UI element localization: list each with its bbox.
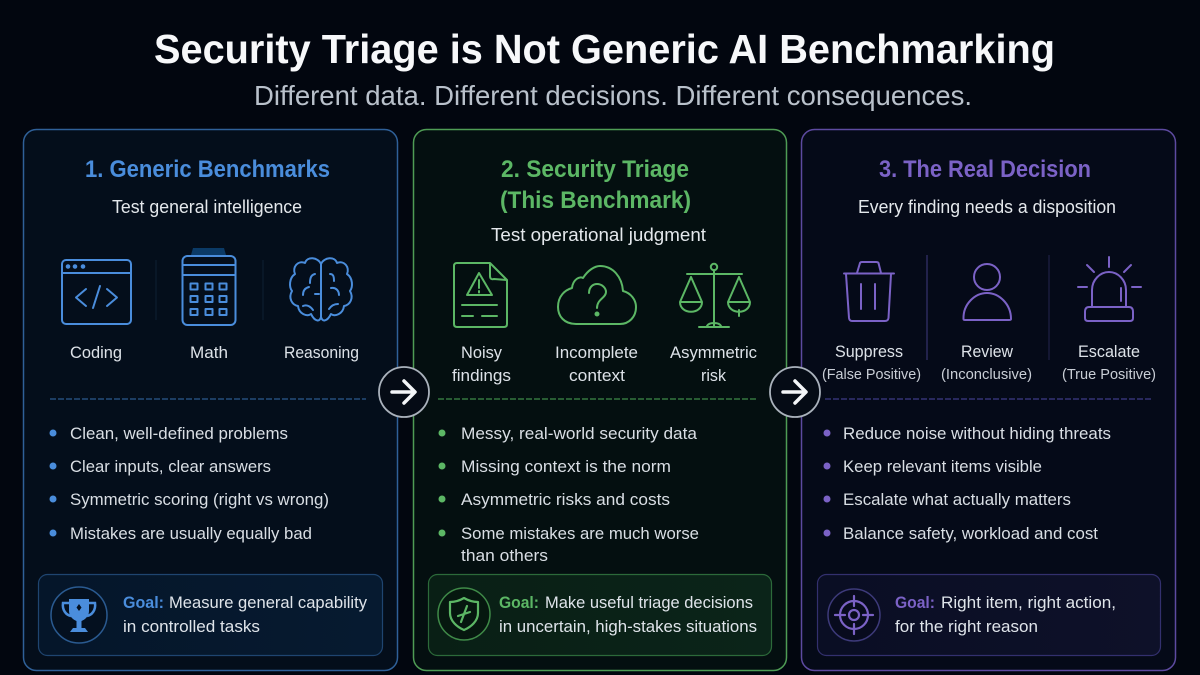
goal text: Goal:	[895, 593, 935, 612]
panel: security triage	[414, 130, 786, 670]
goal text: in uncertain, high-stakes situations	[499, 617, 757, 636]
goal text: Make useful triage decisions	[545, 593, 753, 612]
subheading: test operational judgment: Test operational judgment	[491, 225, 706, 245]
bullet list	[824, 424, 1111, 543]
bullet list: Clear inputs, clear answers	[70, 457, 271, 476]
goal text: Goal:	[499, 593, 539, 612]
label: math: Math	[190, 343, 228, 362]
arrow: generic to triage	[379, 367, 429, 417]
label: escalate: (True Positive)	[1062, 367, 1156, 383]
bullet list: than others	[461, 546, 548, 565]
icon: cloud with question mark	[558, 266, 636, 324]
bullet list: Messy, real-world security data	[461, 424, 698, 443]
heading: security triage: (This Benchmark)	[500, 187, 691, 214]
bullet list: Some mistakes are much worse	[461, 524, 699, 543]
subheading: every finding needs a disposition: Every finding needs a disposition	[858, 197, 1116, 217]
label: incomplete context: context	[569, 366, 625, 385]
heading: security triage	[500, 156, 691, 214]
label: incomplete context	[555, 343, 638, 385]
bullet list: Balance safety, workload and cost	[843, 524, 1098, 543]
icon: brain	[290, 258, 352, 320]
goal box: decision	[818, 574, 1160, 656]
title: Security Triage is Not Generic AI Benchmarking	[154, 26, 1055, 72]
label: review: Review	[961, 342, 1014, 361]
goal text: Goal:	[123, 593, 164, 612]
label: coding: Coding	[70, 343, 122, 362]
subheading: test general intelligence: Test general intelligence	[112, 197, 302, 217]
heading: generic benchmarks: 1. Generic Benchmarks	[85, 156, 330, 183]
label: noisy findings: findings	[452, 366, 511, 385]
label: suppress	[822, 342, 921, 383]
bullet list	[50, 424, 329, 543]
goal text: Right item, right action,	[941, 593, 1116, 612]
label: asymmetric risk: risk	[701, 366, 726, 385]
label: noisy findings	[452, 343, 511, 385]
goal text	[123, 593, 367, 636]
goal text	[499, 593, 757, 636]
label: suppress: Suppress	[835, 342, 903, 361]
goal text: in controlled tasks	[123, 617, 260, 636]
icon: trophy	[51, 587, 107, 643]
goal box: generic	[38, 574, 382, 656]
goal text: for the right reason	[895, 617, 1038, 636]
panel: real decision	[802, 130, 1176, 670]
subtitle: Different data. Different decisions. Different consequences.	[254, 80, 972, 111]
label: asymmetric risk: Asymmetric	[670, 343, 757, 362]
icon: trash can	[844, 262, 894, 321]
goal text	[895, 593, 1116, 636]
icon: alarm	[1078, 257, 1141, 321]
label: review: (Inconclusive)	[941, 367, 1032, 383]
bullet list: Reduce noise without hiding threats	[843, 424, 1111, 443]
icon: target	[828, 589, 880, 641]
label: asymmetric risk	[670, 343, 757, 385]
heading: security triage: 2. Security Triage	[501, 156, 689, 183]
goal box: triage	[428, 574, 772, 656]
label: suppress: (False Positive)	[822, 367, 921, 383]
icon: shield	[438, 588, 490, 640]
bullet list	[438, 424, 699, 565]
icon: code window	[62, 260, 131, 324]
label: reasoning: Reasoning	[284, 343, 359, 362]
icon: calculator	[182, 248, 236, 325]
icon: person	[963, 264, 1011, 320]
arrow: triage to decision	[770, 367, 820, 417]
bullet list: Clean, well-defined problems	[70, 424, 288, 443]
label: noisy findings: Noisy	[461, 343, 502, 362]
goal text: Measure general capability	[169, 593, 367, 612]
icon: balance scale	[680, 264, 750, 327]
bullet list: Asymmetric risks and costs	[461, 490, 670, 509]
panel: generic benchmarks	[24, 130, 398, 670]
bullet list: Missing context is the norm	[461, 457, 671, 476]
label: escalate	[1062, 342, 1156, 383]
bullet list: Keep relevant items visible	[843, 457, 1042, 476]
label: review	[941, 342, 1032, 383]
icon: noisy document	[454, 263, 507, 327]
bullet list: Mistakes are usually equally bad	[70, 524, 312, 543]
label: escalate: Escalate	[1078, 342, 1140, 361]
bullet list: Symmetric scoring (right vs wrong)	[70, 490, 329, 509]
bullet list: Escalate what actually matters	[843, 490, 1071, 509]
label: incomplete context: Incomplete	[555, 343, 638, 362]
heading: real decision: 3. The Real Decision	[879, 156, 1091, 183]
